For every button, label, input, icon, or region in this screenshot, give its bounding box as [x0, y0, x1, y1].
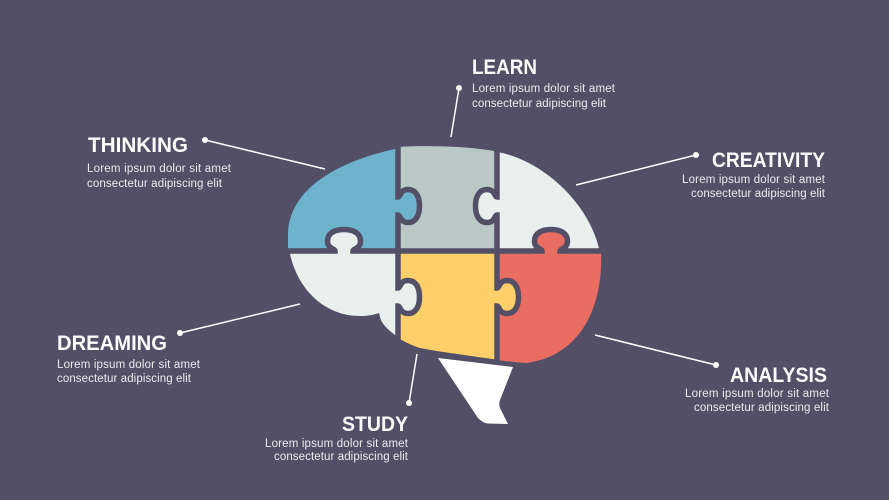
knob: light into blue [328, 230, 360, 251]
leader line [595, 335, 719, 368]
brain puzzle [285, 144, 604, 424]
leader line [177, 304, 300, 336]
heading group: DREAMING [57, 304, 300, 385]
heading group: STUDY [265, 354, 417, 463]
knob: light into yellow [398, 280, 420, 314]
piece: top right light [497, 152, 600, 251]
description [472, 83, 616, 110]
heading group: ANALYSIS [595, 335, 830, 414]
heading group: CREATIVITY [576, 149, 826, 200]
puzzle seams [285, 144, 604, 364]
piece: bottom left light [288, 251, 398, 338]
description: consectetur adipiscing elit [57, 373, 192, 385]
leader line [576, 152, 699, 185]
leader line [202, 137, 325, 169]
description: Lorem ipsum dolor sit amet [685, 388, 830, 400]
knob: yellow into red [497, 280, 518, 314]
knob: blue into grey [398, 190, 420, 222]
heading group: THINKING [87, 134, 325, 190]
description [265, 438, 409, 463]
knob: red into light [534, 230, 568, 251]
description: Lorem ipsum dolor sit amet [682, 174, 826, 186]
description: consectetur adipiscing elit [691, 188, 826, 200]
piece: speech tail [438, 358, 513, 424]
description: Lorem ipsum dolor sit amet [472, 83, 616, 95]
piece: top left blue [288, 148, 398, 251]
description [685, 388, 830, 414]
piece: top middle grey [398, 146, 497, 251]
title: DREAMING [57, 332, 167, 355]
description: consectetur adipiscing elit [87, 178, 223, 190]
description: Lorem ipsum dolor sit amet [87, 163, 232, 175]
description: Lorem ipsum dolor sit amet [57, 359, 201, 371]
description [87, 163, 232, 190]
piece: bottom right red [497, 251, 601, 363]
description [57, 359, 201, 385]
description: consectetur adipiscing elit [694, 402, 830, 414]
leader line [406, 354, 417, 406]
title: CREATIVITY [712, 149, 825, 172]
description: Lorem ipsum dolor sit amet [265, 438, 409, 450]
title: THINKING [88, 134, 188, 157]
title: STUDY [342, 413, 408, 436]
description: consectetur adipiscing elit [274, 451, 409, 463]
title: LEARN [472, 56, 537, 79]
knob: light into grey [476, 190, 497, 222]
description [682, 174, 826, 200]
title: ANALYSIS [730, 364, 827, 387]
piece: bottom middle yellow [398, 251, 497, 360]
heading group: LEARN [451, 56, 616, 137]
leader line [451, 85, 462, 137]
description: consectetur adipiscing elit [472, 98, 607, 110]
